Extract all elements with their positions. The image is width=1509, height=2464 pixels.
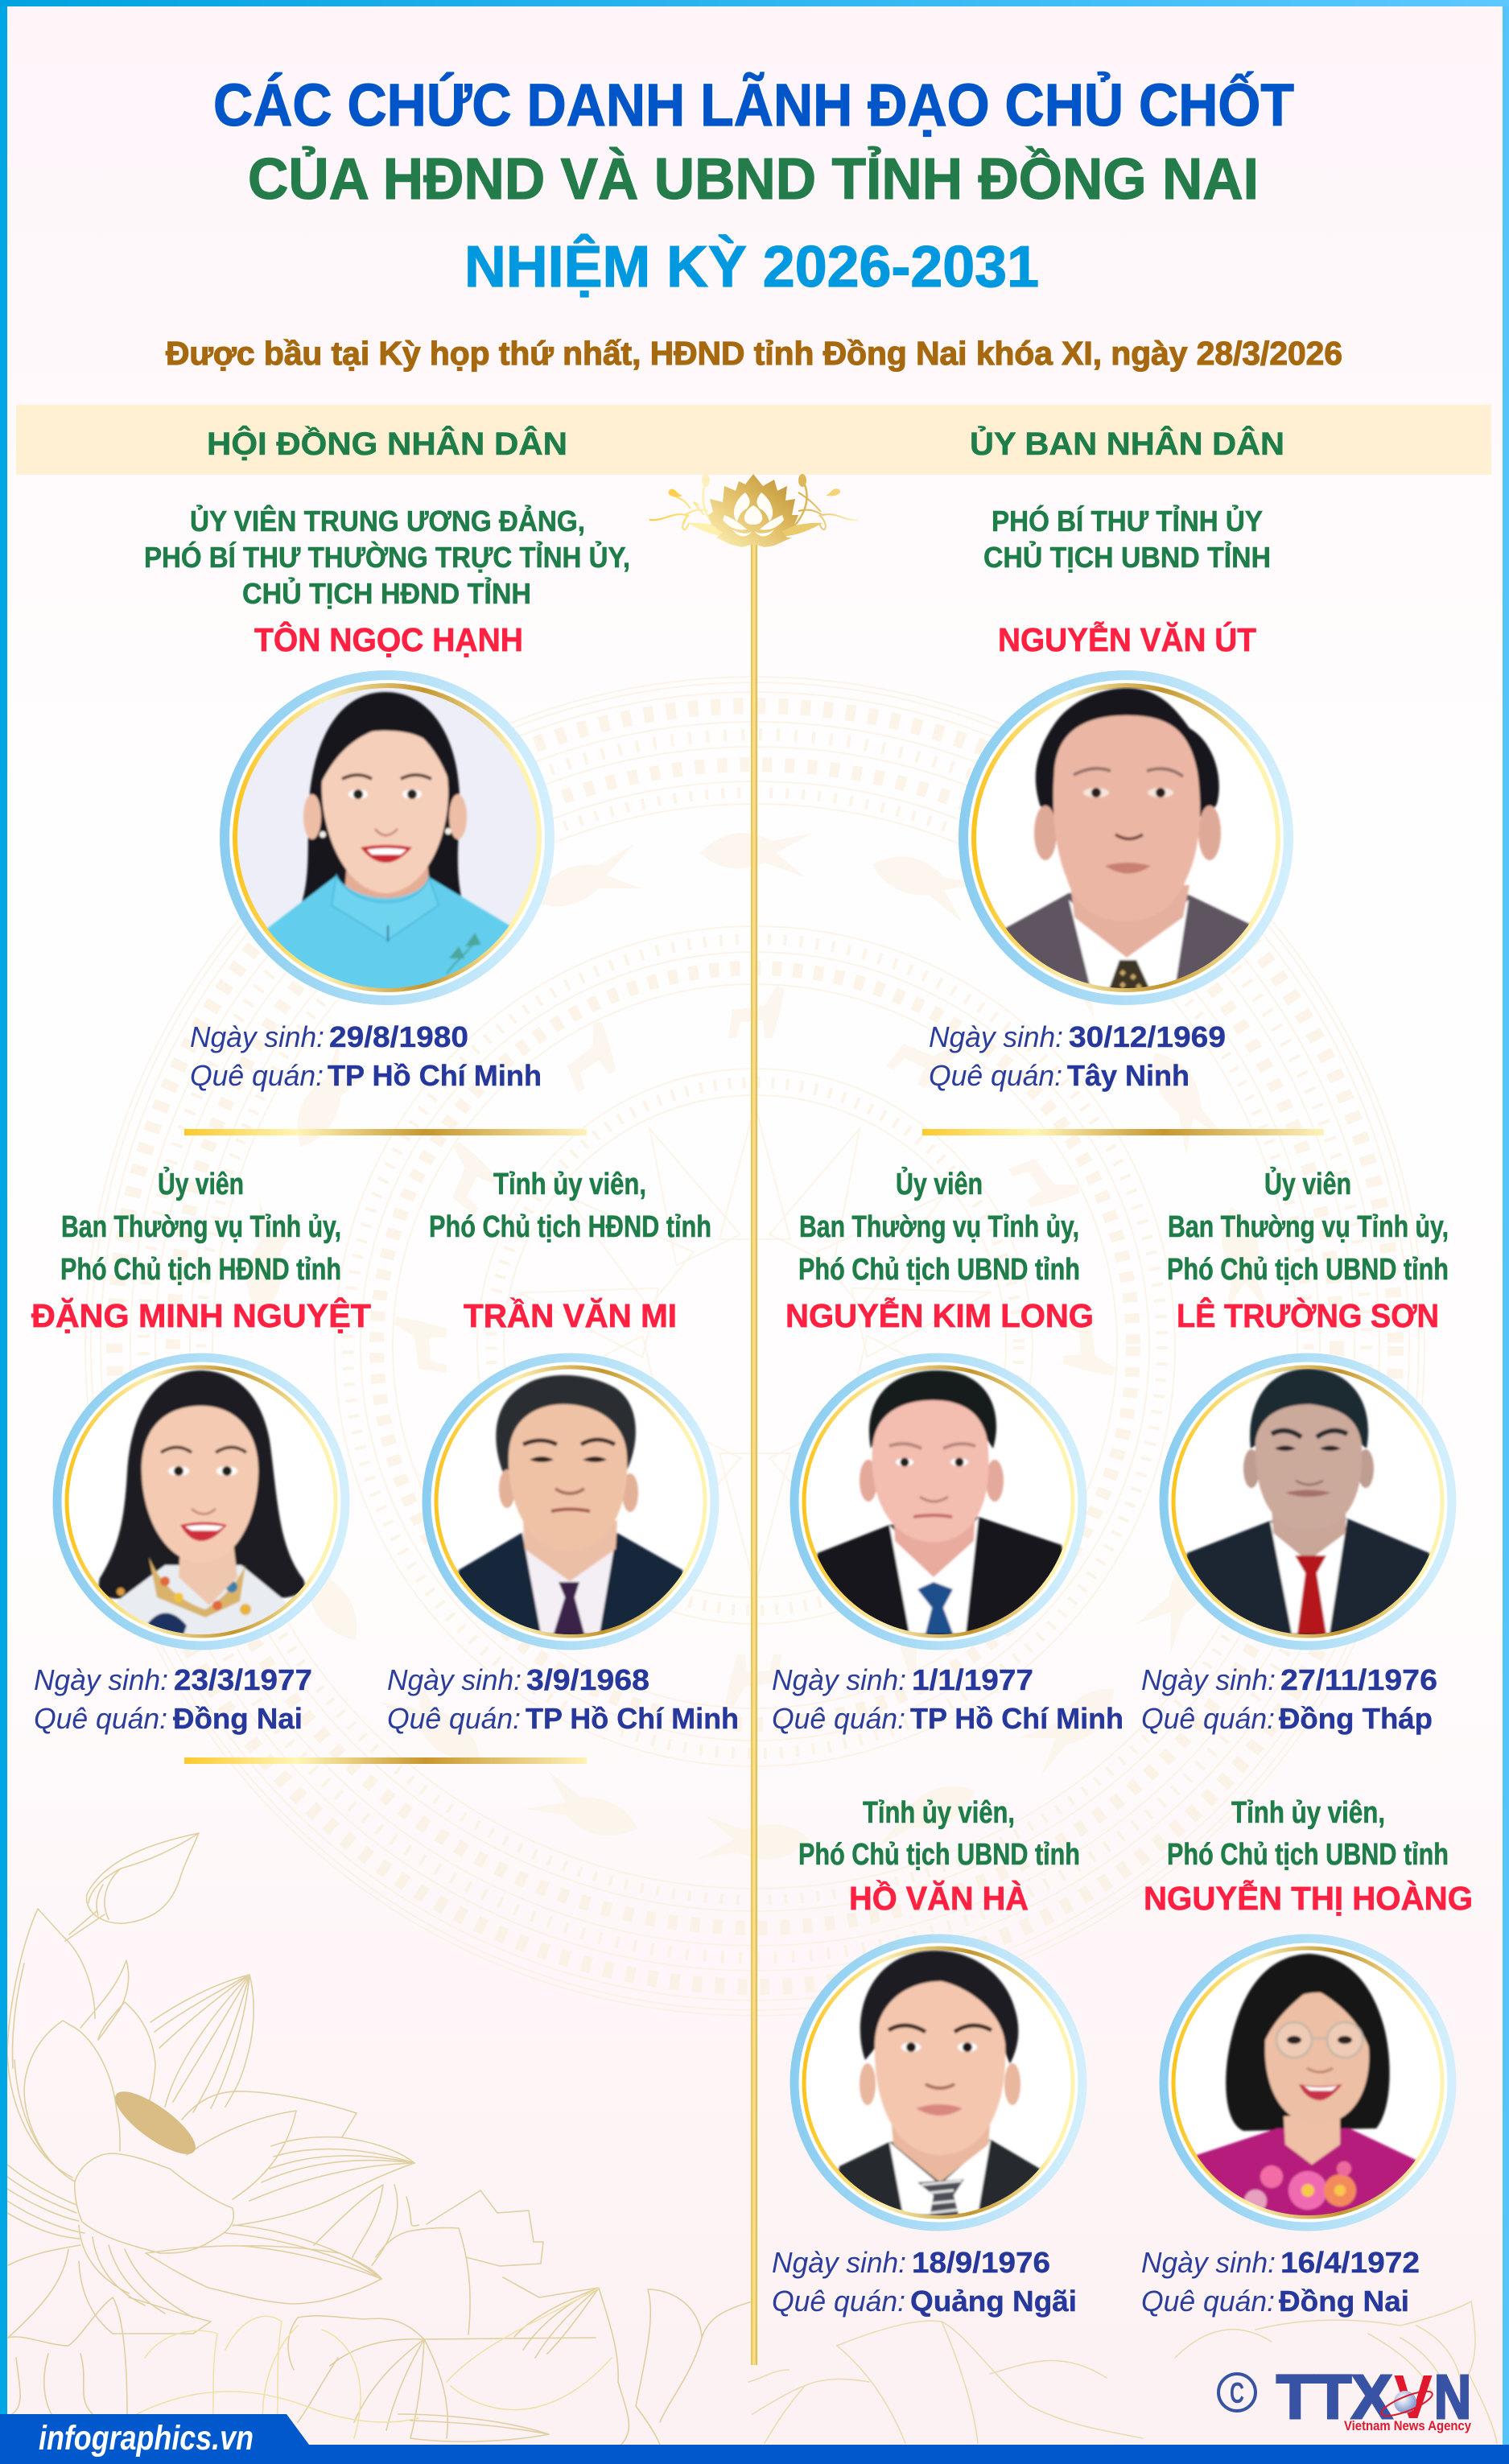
lotus line art, lower right bbox=[748, 2301, 1497, 2443]
birth and hometown: Ngày sinh: bbox=[929, 1020, 1063, 1053]
role text: Ủy viên bbox=[158, 1166, 244, 1201]
role text bbox=[60, 1166, 341, 1287]
name: NGUYỄN KIM LONG bbox=[785, 1297, 1094, 1334]
birth and hometown bbox=[1141, 2246, 1420, 2318]
birth and hometown: 30/12/1969 bbox=[1069, 1020, 1226, 1053]
center divider line bbox=[751, 541, 757, 2365]
bronze drum watermark bbox=[85, 677, 1424, 2016]
role text bbox=[798, 1796, 1080, 1872]
logo: TTXVN: Vietnam News Agency bbox=[1344, 2418, 1471, 2433]
panel: Nguyễn Kim Long bbox=[772, 1166, 1124, 1735]
birth and hometown: 18/9/1976 bbox=[912, 2246, 1050, 2279]
role text: Tỉnh ủy viên, bbox=[493, 1168, 646, 1201]
birth and hometown: TP Hồ Chí Minh bbox=[328, 1059, 542, 1092]
role text: Phó Chủ tịch HĐND tỉnh bbox=[60, 1253, 341, 1287]
birth and hometown bbox=[1141, 1663, 1437, 1735]
birth and hometown: Quê quán: bbox=[34, 1702, 167, 1735]
role text: Phó Chủ tịch UBND tỉnh bbox=[798, 1838, 1080, 1872]
birth and hometown: Quê quán: bbox=[1141, 2285, 1275, 2318]
portrait bbox=[1164, 1939, 1452, 2227]
role text: Ủy viên bbox=[1264, 1166, 1351, 1201]
column header band: ỦY BAN NHÂN DÂN bbox=[970, 425, 1284, 462]
role text: CHỦ TỊCH HĐND TỈNH bbox=[242, 576, 531, 610]
name: ĐẶNG MINH NGUYỆT bbox=[31, 1297, 371, 1334]
role text: Tỉnh ủy viên, bbox=[863, 1796, 1015, 1830]
birth and hometown: TP Hồ Chí Minh bbox=[910, 1702, 1124, 1735]
name: HỒ VĂN HÀ bbox=[849, 1880, 1029, 1917]
icon: gold lotus bbox=[649, 474, 858, 547]
birth and hometown bbox=[929, 1020, 1226, 1092]
birth and hometown: 16/4/1972 bbox=[1280, 2246, 1420, 2279]
birth and hometown: 29/8/1980 bbox=[329, 1020, 468, 1053]
birth and hometown: Ngày sinh: bbox=[1141, 2246, 1276, 2279]
role text: Ban Thường vụ Tỉnh ủy, bbox=[61, 1210, 341, 1244]
lotus seed pod bbox=[107, 2082, 204, 2164]
birth and hometown: Đồng Nai bbox=[1279, 2285, 1409, 2318]
birth and hometown: Quê quán: bbox=[772, 1702, 905, 1735]
birth and hometown: Quảng Ngãi bbox=[910, 2285, 1077, 2318]
birth and hometown bbox=[190, 1020, 542, 1092]
subtitle: Được bầu tại Kỳ họp thứ nhất, HĐND tỉnh Đồng Nai khóa XI, ngày 28/3/2026 bbox=[166, 335, 1342, 372]
role text: Phó Chủ tịch UBND tỉnh bbox=[1167, 1838, 1449, 1872]
birth and hometown: Quê quán: bbox=[772, 2285, 905, 2318]
logo: TTXVN: V bbox=[1394, 2363, 1433, 2432]
title bbox=[213, 72, 1294, 299]
portrait bbox=[57, 1358, 345, 1646]
panel: Hồ Văn Hà bbox=[772, 1796, 1082, 2318]
role text bbox=[1167, 1796, 1449, 1872]
birth and hometown: Tây Ninh bbox=[1067, 1059, 1189, 1092]
birth and hometown: Đồng Tháp bbox=[1279, 1702, 1433, 1735]
role text: Ban Thường vụ Tỉnh ủy, bbox=[799, 1210, 1079, 1244]
lotus line art, lower left bbox=[7, 1833, 752, 2446]
panel: Đặng Minh Nguyệt bbox=[31, 1166, 371, 1735]
birth and hometown bbox=[34, 1663, 312, 1735]
birth and hometown: TP Hồ Chí Minh bbox=[526, 1702, 739, 1735]
birth and hometown: Ngày sinh: bbox=[1141, 1663, 1276, 1696]
birth and hometown: Ngày sinh: bbox=[387, 1663, 522, 1696]
panel: Nguyễn Thị Hoàng bbox=[1141, 1796, 1473, 2318]
portrait bbox=[794, 1358, 1082, 1646]
birth and hometown: Quê quán: bbox=[929, 1059, 1062, 1092]
birth and hometown: 27/11/1976 bbox=[1280, 1663, 1437, 1696]
birth and hometown: 3/9/1968 bbox=[526, 1663, 649, 1696]
panel: HĐND - Tôn Ngọc Hạnh bbox=[144, 504, 630, 1092]
birth and hometown: Ngày sinh: bbox=[772, 1663, 906, 1696]
footer bar with website tab: infographics.vn bbox=[39, 2419, 254, 2458]
panel: UBND - Nguyễn Văn Út bbox=[929, 504, 1288, 1092]
portrait bbox=[1164, 1358, 1452, 1646]
title: CỦA HĐND VÀ UBND TỈNH ĐỒNG NAI bbox=[248, 146, 1259, 212]
role text bbox=[798, 1166, 1080, 1287]
title: NHIỆM KỲ 2026-2031 bbox=[464, 234, 1039, 299]
logo: TTXVN bbox=[1276, 2363, 1471, 2433]
role text bbox=[1167, 1166, 1449, 1287]
role text bbox=[144, 504, 630, 610]
logo: TTXVN: N bbox=[1434, 2363, 1471, 2432]
name: TRẦN VĂN MI bbox=[464, 1297, 677, 1334]
name: NGUYỄN THỊ HOÀNG bbox=[1144, 1880, 1473, 1917]
panel: Trần Văn Mi bbox=[387, 1168, 739, 1735]
name: NGUYỄN VĂN ÚT bbox=[998, 621, 1256, 658]
role text: PHÓ BÍ THƯ THƯỜNG TRỰC TỈNH ỦY, bbox=[144, 540, 630, 574]
role text: PHÓ BÍ THƯ TỈNH ỦY bbox=[992, 504, 1263, 538]
birth and hometown: Quê quán: bbox=[190, 1059, 324, 1092]
portrait bbox=[963, 675, 1288, 1000]
role text: Phó Chủ tịch UBND tỉnh bbox=[798, 1253, 1080, 1287]
birth and hometown bbox=[772, 2246, 1077, 2318]
portrait bbox=[225, 675, 550, 1000]
role text bbox=[429, 1168, 711, 1244]
birth and hometown: Ngày sinh: bbox=[190, 1020, 324, 1053]
birth and hometown: Ngày sinh: bbox=[34, 1663, 168, 1696]
name: TÔN NGỌC HẠNH bbox=[254, 621, 523, 658]
column header band bbox=[16, 405, 1491, 475]
footer bar with website tab bbox=[0, 2414, 1509, 2464]
role text: Phó Chủ tịch HĐND tỉnh bbox=[429, 1210, 711, 1244]
birth and hometown: 1/1/1977 bbox=[912, 1663, 1033, 1696]
role text: CHỦ TỊCH UBND TỈNH bbox=[983, 540, 1271, 574]
role text bbox=[983, 504, 1271, 574]
role text: Ủy viên bbox=[896, 1166, 983, 1201]
gold dividers bbox=[184, 1129, 1324, 1764]
title: CÁC CHỨC DANH LÃNH ĐẠO CHỦ CHỐT bbox=[213, 72, 1294, 138]
panel: Lê Trường Sơn bbox=[1141, 1166, 1452, 1735]
column header band: HỘI ĐỒNG NHÂN DÂN bbox=[207, 425, 567, 462]
copyright mark: C bbox=[1230, 2376, 1244, 2409]
logo: TTXVN: TTX bbox=[1276, 2363, 1392, 2432]
birth and hometown: 23/3/1977 bbox=[174, 1663, 312, 1696]
role text: ỦY VIÊN TRUNG ƯƠNG ĐẢNG, bbox=[190, 504, 585, 538]
birth and hometown: Quê quán: bbox=[387, 1702, 521, 1735]
birth and hometown: Ngày sinh: bbox=[772, 2246, 906, 2279]
birth and hometown bbox=[387, 1663, 739, 1735]
birth and hometown: Quê quán: bbox=[1141, 1702, 1275, 1735]
birth and hometown: Đồng Nai bbox=[173, 1702, 303, 1735]
portrait bbox=[794, 1939, 1082, 2227]
copyright mark bbox=[1218, 2374, 1255, 2411]
portrait bbox=[427, 1358, 715, 1646]
name: LÊ TRƯỜNG SƠN bbox=[1177, 1297, 1439, 1334]
role text: Phó Chủ tịch UBND tỉnh bbox=[1167, 1253, 1449, 1287]
role text: Tỉnh ủy viên, bbox=[1231, 1796, 1385, 1830]
birth and hometown bbox=[772, 1663, 1124, 1735]
